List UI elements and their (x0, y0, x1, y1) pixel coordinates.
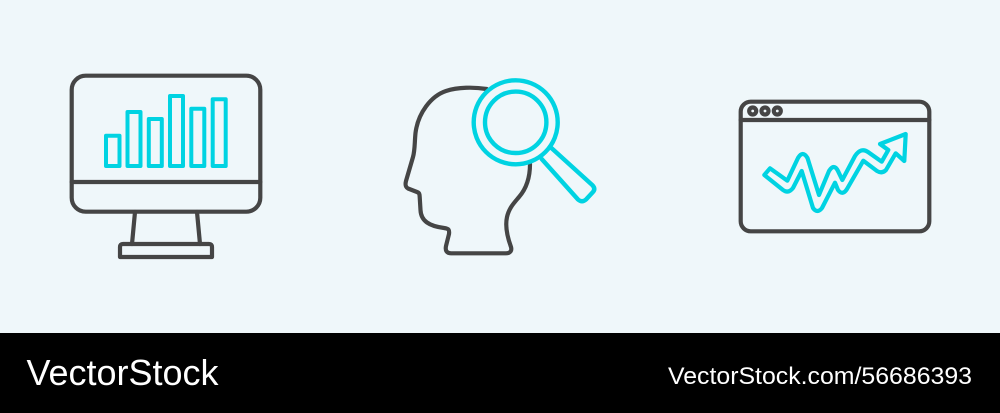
bar chart (106, 96, 226, 166)
rising arrow line (764, 134, 906, 211)
brand name: VectorStock (26, 352, 219, 393)
head outline (406, 88, 530, 253)
magnifying glass (474, 80, 594, 201)
footer bar (0, 333, 1000, 413)
icon: head with magnifying glass (406, 80, 594, 253)
icon: monitor with bar chart (72, 76, 260, 257)
image id url: VectorStock.com/56686393 (668, 363, 972, 390)
monitor body (72, 76, 260, 257)
icon: browser window with rising chart (741, 102, 929, 231)
browser window (741, 102, 929, 231)
